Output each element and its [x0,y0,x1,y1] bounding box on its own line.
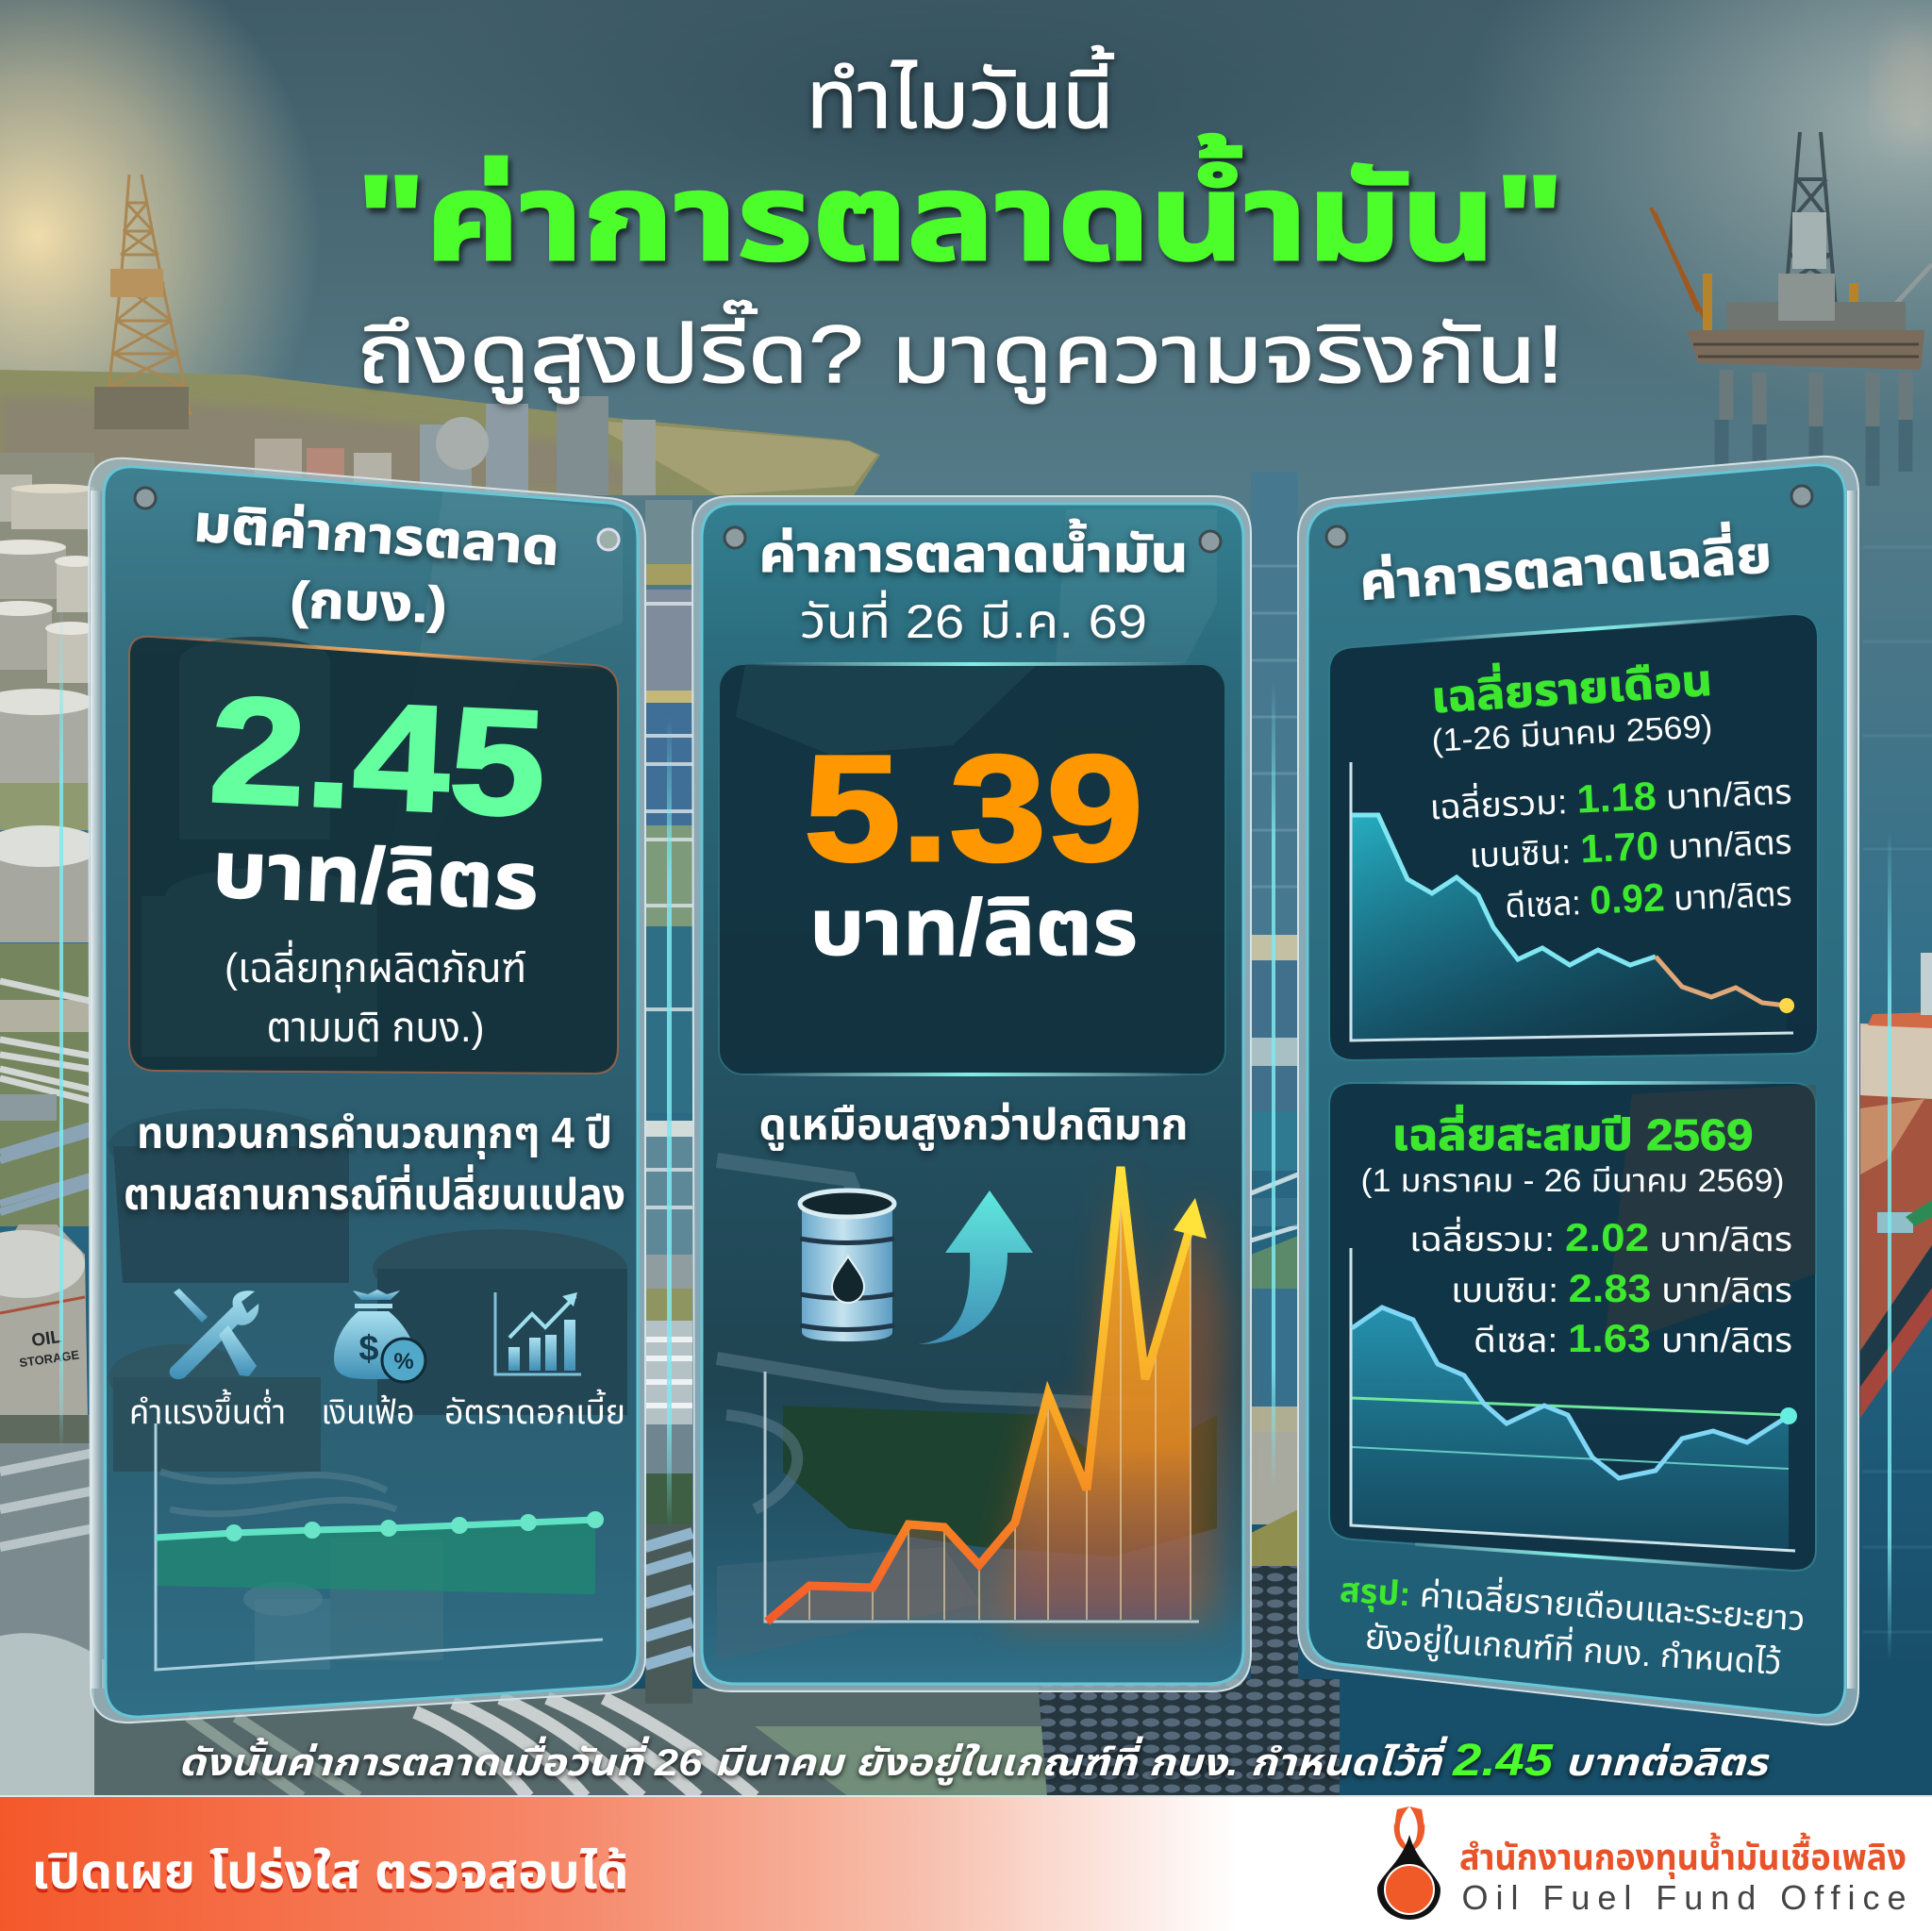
subheading: ดูเหมือนสูงกว่าปกติมาก [758,1100,1189,1151]
review text [124,1108,625,1219]
panel: right averages [1298,457,1858,1724]
card: monthly average: (1-26 มีนาคม 2569) [1431,708,1713,759]
heading: มติค่าการตลาด [192,495,561,576]
value: 2.45 [207,664,549,848]
heading: ค่าการตลาดน้ำมัน [758,519,1189,583]
heading: (กบง.) [290,572,448,634]
icon: oil barrel [800,1190,894,1341]
icon labels: คำแรงขึ้นต่ำ [129,1389,286,1431]
left oil derrick [94,175,191,429]
logo mark [1377,1806,1441,1920]
panel: left resolution [89,458,645,1723]
arrow: rising [918,1190,1033,1344]
gap strip between centre and right panels [1251,472,1298,1689]
value: 5.39 [804,724,1143,892]
card: monthly average [1329,614,1818,1060]
monthly values: ดีเซล: 0.92 บาท/ลิตร [1504,869,1792,926]
line chart: sharp spike [765,1167,1226,1623]
tank label [15,1325,80,1370]
title [357,45,1564,404]
icon: wrench and screwdriver [170,1289,258,1379]
note: (เฉลี่ยทุกผลิตภัณฑ์ [225,940,526,993]
conclusion text: ดังนั้นค่าการตลาดเมื่อวันที่ 26 มีนาคม ยังอยู่ในเกณฑ์ที่ กบง. กำหนดไว้ที่ 2.45 บาทต่อลิตร [178,1736,1771,1786]
offshore platform right [1651,132,1932,486]
icon: money bag [334,1290,425,1382]
sea waves right [1321,547,1932,1773]
monthly values: เฉลี่ยรวม: 1.18 บาท/ลิตร [1429,768,1792,827]
heading [758,519,1189,648]
organisation name English: Oil Fuel Fund Office [1462,1878,1906,1917]
card: cumulative average: (1 มกราคม - 26 มีนาคม 2569) [1360,1163,1785,1199]
cumulative values: เฉลี่ยรวม: 2.02 บาท/ลิตร [1409,1215,1792,1259]
heading [192,495,561,634]
footer band [0,1795,1932,1931]
card: cumulative average [1329,1083,1816,1571]
title line 2: "ค่าการตลาดน้ำมัน" [357,134,1564,286]
review text: ตามสถานการณ์ที่เปลี่ยนแปลง [124,1164,625,1219]
island with refinery [0,370,880,495]
screws [135,488,619,550]
line chart: cumulative [1351,1248,1797,1551]
background tanks seen through glass [108,1108,627,1670]
dark stat box [129,637,618,1074]
monthly values: เบนซิน: 1.70 บาท/ลิตร [1469,818,1792,875]
lower left ground and pipes [0,1443,1932,1797]
monthly values [1429,768,1792,926]
slogan: เปิดเผย โปร่งใส ตรวจสอบได้ [32,1845,628,1900]
glow lines [59,604,1891,1660]
icon labels: เงินเฟ้อ [321,1392,415,1431]
icon labels [129,1389,625,1431]
cargo ship right [1860,953,1932,1418]
organisation name Thai: สำนักงานกองทุนน้ำมันเชื้อเพลิง [1459,1832,1907,1879]
icon: money bag: % [393,1349,414,1374]
icon labels: อัตราดอกเบี้ย [444,1389,625,1431]
card heading: เฉลี่ยสะสมปี 2569 [1392,1105,1753,1159]
summary text: ยังอยู่ในเกณฑ์ที่ กบง. กำหนดไว้ [1364,1613,1783,1683]
panel: center today [692,496,1251,1691]
heading: ค่าการตลาดเฉลี่ย [1357,519,1774,611]
line chart: monthly [1351,762,1794,1040]
review text: ทบทวนการคำนวณทุกๆ 4 ปี [137,1108,612,1159]
title line 1: ทำไมวันนี้ [807,45,1114,145]
screws [724,527,1221,552]
dark stat box: ตามมติ กบง.) [266,1005,485,1051]
tank label: OIL [30,1327,63,1351]
dark stat box [719,664,1225,1074]
cumulative values: เบนซิน: 2.83 บาท/ลิตร [1451,1266,1792,1310]
summary text: สรุป: ค่าเฉลี่ยรายเดือนและระยะยาว [1339,1567,1807,1639]
icon: rising bar chart [495,1292,581,1374]
gap strip between left and centre panels [645,500,692,1704]
scene seen through glass [717,1160,1217,1660]
unit: บาท/ลิตร [210,824,541,926]
summary text [1339,1567,1807,1683]
icon: money bag: $ [358,1329,379,1369]
screws [1326,486,1812,547]
cumulative values [1409,1215,1792,1360]
cumulative values: ดีเซล: 1.63 บาท/ลิตร [1474,1316,1792,1360]
title line 3: ถึงดูสูงปรี๊ด? มาดูความจริงกัน! [357,300,1564,404]
tank label: STORAGE [18,1347,80,1370]
unit: บาท/ลิตร [809,883,1138,972]
heading: วันที่ 26 มี.ค. 69 [800,590,1147,648]
line chart: stable [156,1423,604,1670]
storage tanks left column [0,453,101,1443]
card heading: เฉลี่ยรายเดือน [1429,650,1713,722]
